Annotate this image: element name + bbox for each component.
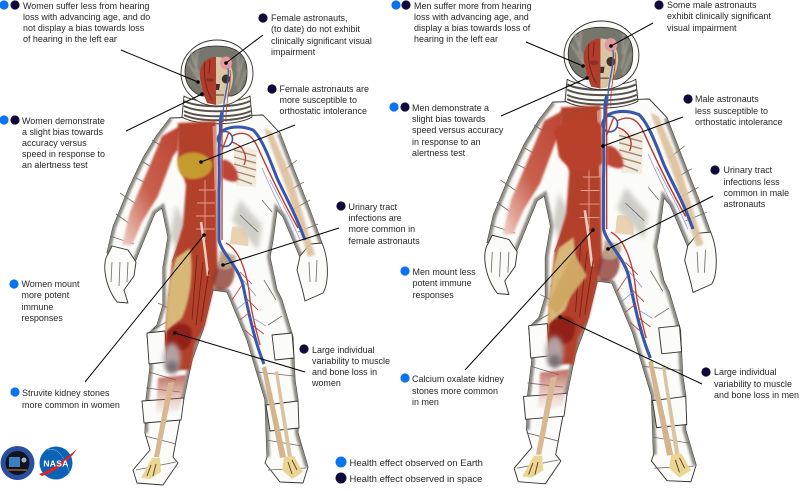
logo: NASA	[39, 446, 77, 480]
logo: mission patch	[0, 446, 34, 480]
callout: female urinary tract: infections are	[348, 213, 402, 223]
callout: struvite kidney stones	[10, 387, 120, 410]
callout: men alertness: speed versus accuracy	[412, 125, 504, 135]
callout: men hearing	[391, 0, 532, 44]
callout: female urinary tract: more common in	[348, 224, 415, 234]
callout: calcium oxalate kidney stones: Calcium oxalate kidney	[412, 374, 504, 384]
callout: female orthostatic intolerance: orthostatic intolerance	[280, 106, 367, 116]
callout: female urinary tract: female astronauts	[348, 236, 420, 246]
callout: female vision: clinically significant visual	[271, 36, 372, 46]
callout: male orthostatic intolerance: less susceptible to	[695, 106, 768, 116]
callout: men immune	[400, 266, 476, 300]
panel: male astronaut figure	[485, 21, 716, 484]
callout: women muscle and bone: Large individual	[312, 345, 375, 355]
callout: women immune: Women mount	[22, 279, 80, 289]
callout: women hearing	[0, 0, 150, 44]
callout: women alertness: an alertness test	[22, 160, 88, 170]
callout: women muscle and bone: and bone loss in	[312, 367, 377, 377]
callout: women immune	[9, 279, 80, 323]
callout: men immune: Men mount less	[412, 267, 476, 277]
callout: female urinary tract	[336, 201, 420, 246]
leader lines: male	[465, 23, 713, 384]
callout: men muscle and bone: variability to muscle	[714, 379, 792, 389]
callout: women immune: more potent	[22, 290, 70, 300]
callout: male vision	[654, 0, 771, 33]
callout: male vision: visual impairment	[667, 23, 737, 33]
callout: women hearing: of hearing in the left ear	[23, 34, 117, 44]
callout: male urinary tract	[710, 165, 789, 209]
callout: men hearing: display a bias towards loss of	[414, 23, 531, 33]
callout: female orthostatic intolerance	[267, 84, 369, 116]
callout: women muscle and bone: variability to muscle	[312, 356, 390, 366]
callout: men hearing: Men suffer more from hearing	[414, 1, 532, 11]
callout: women hearing: loss with advancing age, and do	[23, 12, 150, 22]
callout: calcium oxalate kidney stones: stones more common	[412, 386, 498, 396]
callout: male orthostatic intolerance: Male astronauts	[695, 94, 759, 104]
callout: women muscle and bone: women	[311, 378, 341, 388]
callout: men muscle and bone: and bone loss in men	[714, 390, 799, 400]
callout: male urinary tract: Urinary tract	[724, 165, 773, 175]
callout: women hearing: not display a bias towards loss	[23, 23, 145, 33]
callout: men immune: responses	[412, 290, 454, 300]
callout: men muscle and bone	[701, 367, 799, 400]
callout: male orthostatic intolerance	[683, 94, 782, 127]
callout: women immune: immune	[22, 302, 53, 312]
callout: female orthostatic intolerance: more susceptible to	[280, 95, 357, 105]
thigh adipose tissue	[547, 252, 587, 314]
callout: women alertness	[0, 115, 105, 170]
callout: male orthostatic intolerance: orthostatic intolerance	[695, 117, 782, 127]
callout: male vision: Some male astronauts	[667, 0, 757, 10]
callout: women alertness: accuracy versus	[22, 138, 87, 148]
callout: women muscle and bone	[299, 344, 390, 388]
chest muscle	[555, 118, 603, 171]
legend item: Earth: Health effect observed on Earth	[350, 458, 483, 469]
callout: men alertness: Men demonstrate a	[412, 103, 489, 113]
callout: women hearing: Women suffer less from hearing	[23, 1, 149, 11]
legend item: space: Health effect observed in space	[350, 474, 482, 485]
callout: men alertness: in response to an	[412, 137, 481, 147]
callout: male urinary tract: infections less	[724, 177, 780, 187]
callout: female vision	[258, 13, 372, 57]
chest muscle and breast tissue	[178, 152, 212, 179]
callout: men hearing: loss with advancing age, and	[414, 12, 529, 22]
callout: struvite kidney stones: more common in women	[22, 400, 120, 410]
callout: women alertness: a slight bias towards	[22, 127, 104, 137]
callout: male urinary tract: astronauts	[724, 199, 766, 209]
callout: calcium oxalate kidney stones: in men	[412, 397, 439, 407]
leader lines: female	[85, 35, 339, 382]
callout: women immune: responses	[22, 313, 63, 323]
callout: male urinary tract: common in male	[724, 188, 789, 198]
callout: men hearing: hearing in the left ear	[414, 34, 498, 44]
callout: female urinary tract: Urinary tract	[348, 202, 398, 212]
callout: female vision: Female astronauts,	[271, 13, 348, 23]
callout: struvite kidney stones: Struvite kidney stones	[22, 388, 110, 398]
callout: men immune: potent immune	[412, 278, 472, 288]
callout: calcium oxalate kidney stones	[400, 373, 504, 407]
callout: men muscle and bone: Large individual	[714, 367, 777, 377]
callout: men alertness: slight bias towards	[412, 114, 486, 124]
logo: NASA: NASA	[43, 458, 69, 468]
callout: male vision: exhibit clinically significant	[667, 11, 771, 21]
callout: female vision: impairment	[271, 47, 316, 57]
callout: female vision: (to date) do not exhibit	[271, 24, 360, 34]
callout: men alertness	[389, 102, 504, 158]
callout: women alertness: Women demonstrate	[22, 116, 105, 126]
panel: female astronaut figure	[105, 40, 327, 485]
callout: men alertness: alertness test	[412, 148, 466, 158]
callout: women alertness: speed in response to	[22, 149, 105, 159]
illustration: female anatomy in spacesuit	[105, 40, 327, 485]
callout: female orthostatic intolerance: Female astronauts are	[280, 84, 369, 94]
legend	[336, 456, 483, 485]
illustration: male anatomy in spacesuit	[485, 21, 716, 484]
